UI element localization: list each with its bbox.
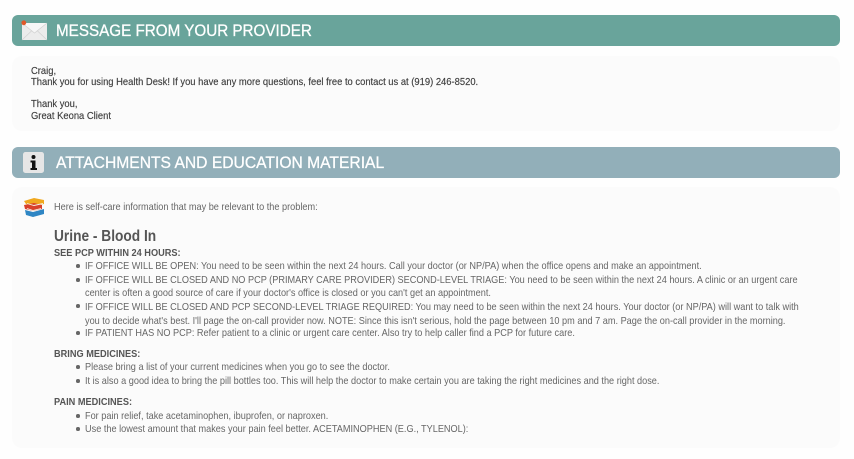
message body: Thank you for using Health Desk! If you have any more questions, feel free to contact us at (919) 246-8520.	[31, 76, 478, 88]
article title: Urine - Blood In	[54, 228, 156, 245]
section heading: pain medicines: PAIN MEDICINES:	[54, 396, 132, 408]
heading: message from your provider: MESSAGE FROM YOUR PROVIDER	[56, 21, 312, 40]
message sign-off: Thank you,	[31, 98, 77, 110]
header bar: attachments and education material	[12, 147, 840, 178]
list: bring medicines	[76, 361, 659, 387]
list item: you to decide what's best. I'll page the on-call provider now. NOTE: Since this isn't serious, hold the page between 10 pm and 7 am. Page the on-call provider in the morning.	[85, 315, 785, 327]
list item: For pain relief, take acetaminophen, ibuprofen, or naproxen.	[85, 410, 328, 422]
message signature: Great Keona Client	[31, 110, 111, 122]
heading: attachments and education material: ATTACHMENTS AND EDUCATION MATERIAL	[56, 153, 384, 172]
list item: It is also a good idea to bring the pill bottles too. This will help the doctor to make certain you are taking the right medicines and the right dose.	[85, 375, 659, 387]
list item: IF PATIENT HAS NO PCP: Refer patient to a clinic or urgent care center. Also try to help caller find a PCP for future care.	[85, 327, 575, 339]
icon: information	[23, 152, 44, 173]
list item: IF OFFICE WILL BE OPEN: You need to be seen within the next 24 hours. Call your doctor (or NP/PA) when the office opens and make an appointment.	[85, 260, 702, 272]
list item	[76, 301, 799, 327]
list item: Use the lowest amount that makes your pain feel better. ACETAMINOPHEN (E.G., TYLENOL):	[85, 423, 468, 435]
list item	[76, 274, 798, 299]
list item: IF OFFICE WILL BE CLOSED AND PCP SECOND-LEVEL TRIAGE REQUIRED: You may need to be seen within the next 24 hours. Your doctor (or NP/PA) will want to talk with	[85, 301, 799, 313]
panel: education material	[12, 187, 840, 448]
panel: provider message	[12, 56, 840, 131]
header bar: message from your provider	[12, 15, 840, 46]
list: see PCP	[76, 260, 799, 339]
list item: Please bring a list of your current medicines when you go to see the doctor.	[85, 361, 390, 373]
section heading: see PCP: SEE PCP WITHIN 24 HOURS:	[54, 247, 181, 259]
icon: envelope with alert badge	[21, 20, 48, 40]
list: pain medicines	[76, 410, 468, 435]
list item: center is often a good source of care if your doctor's office is closed or you can't get an appointment.	[85, 287, 491, 299]
icon: stack of books	[24, 198, 44, 217]
intro text: Here is self-care information that may be relevant to the problem:	[54, 201, 318, 213]
section heading: bring medicines: BRING MEDICINES:	[54, 348, 140, 360]
list item: IF OFFICE WILL BE CLOSED AND NO PCP (PRIMARY CARE PROVIDER) SECOND-LEVEL TRIAGE: You need to be seen within the next 24 hours. A clinic or an urgent care	[85, 274, 798, 286]
message greeting: Craig,	[31, 65, 56, 77]
